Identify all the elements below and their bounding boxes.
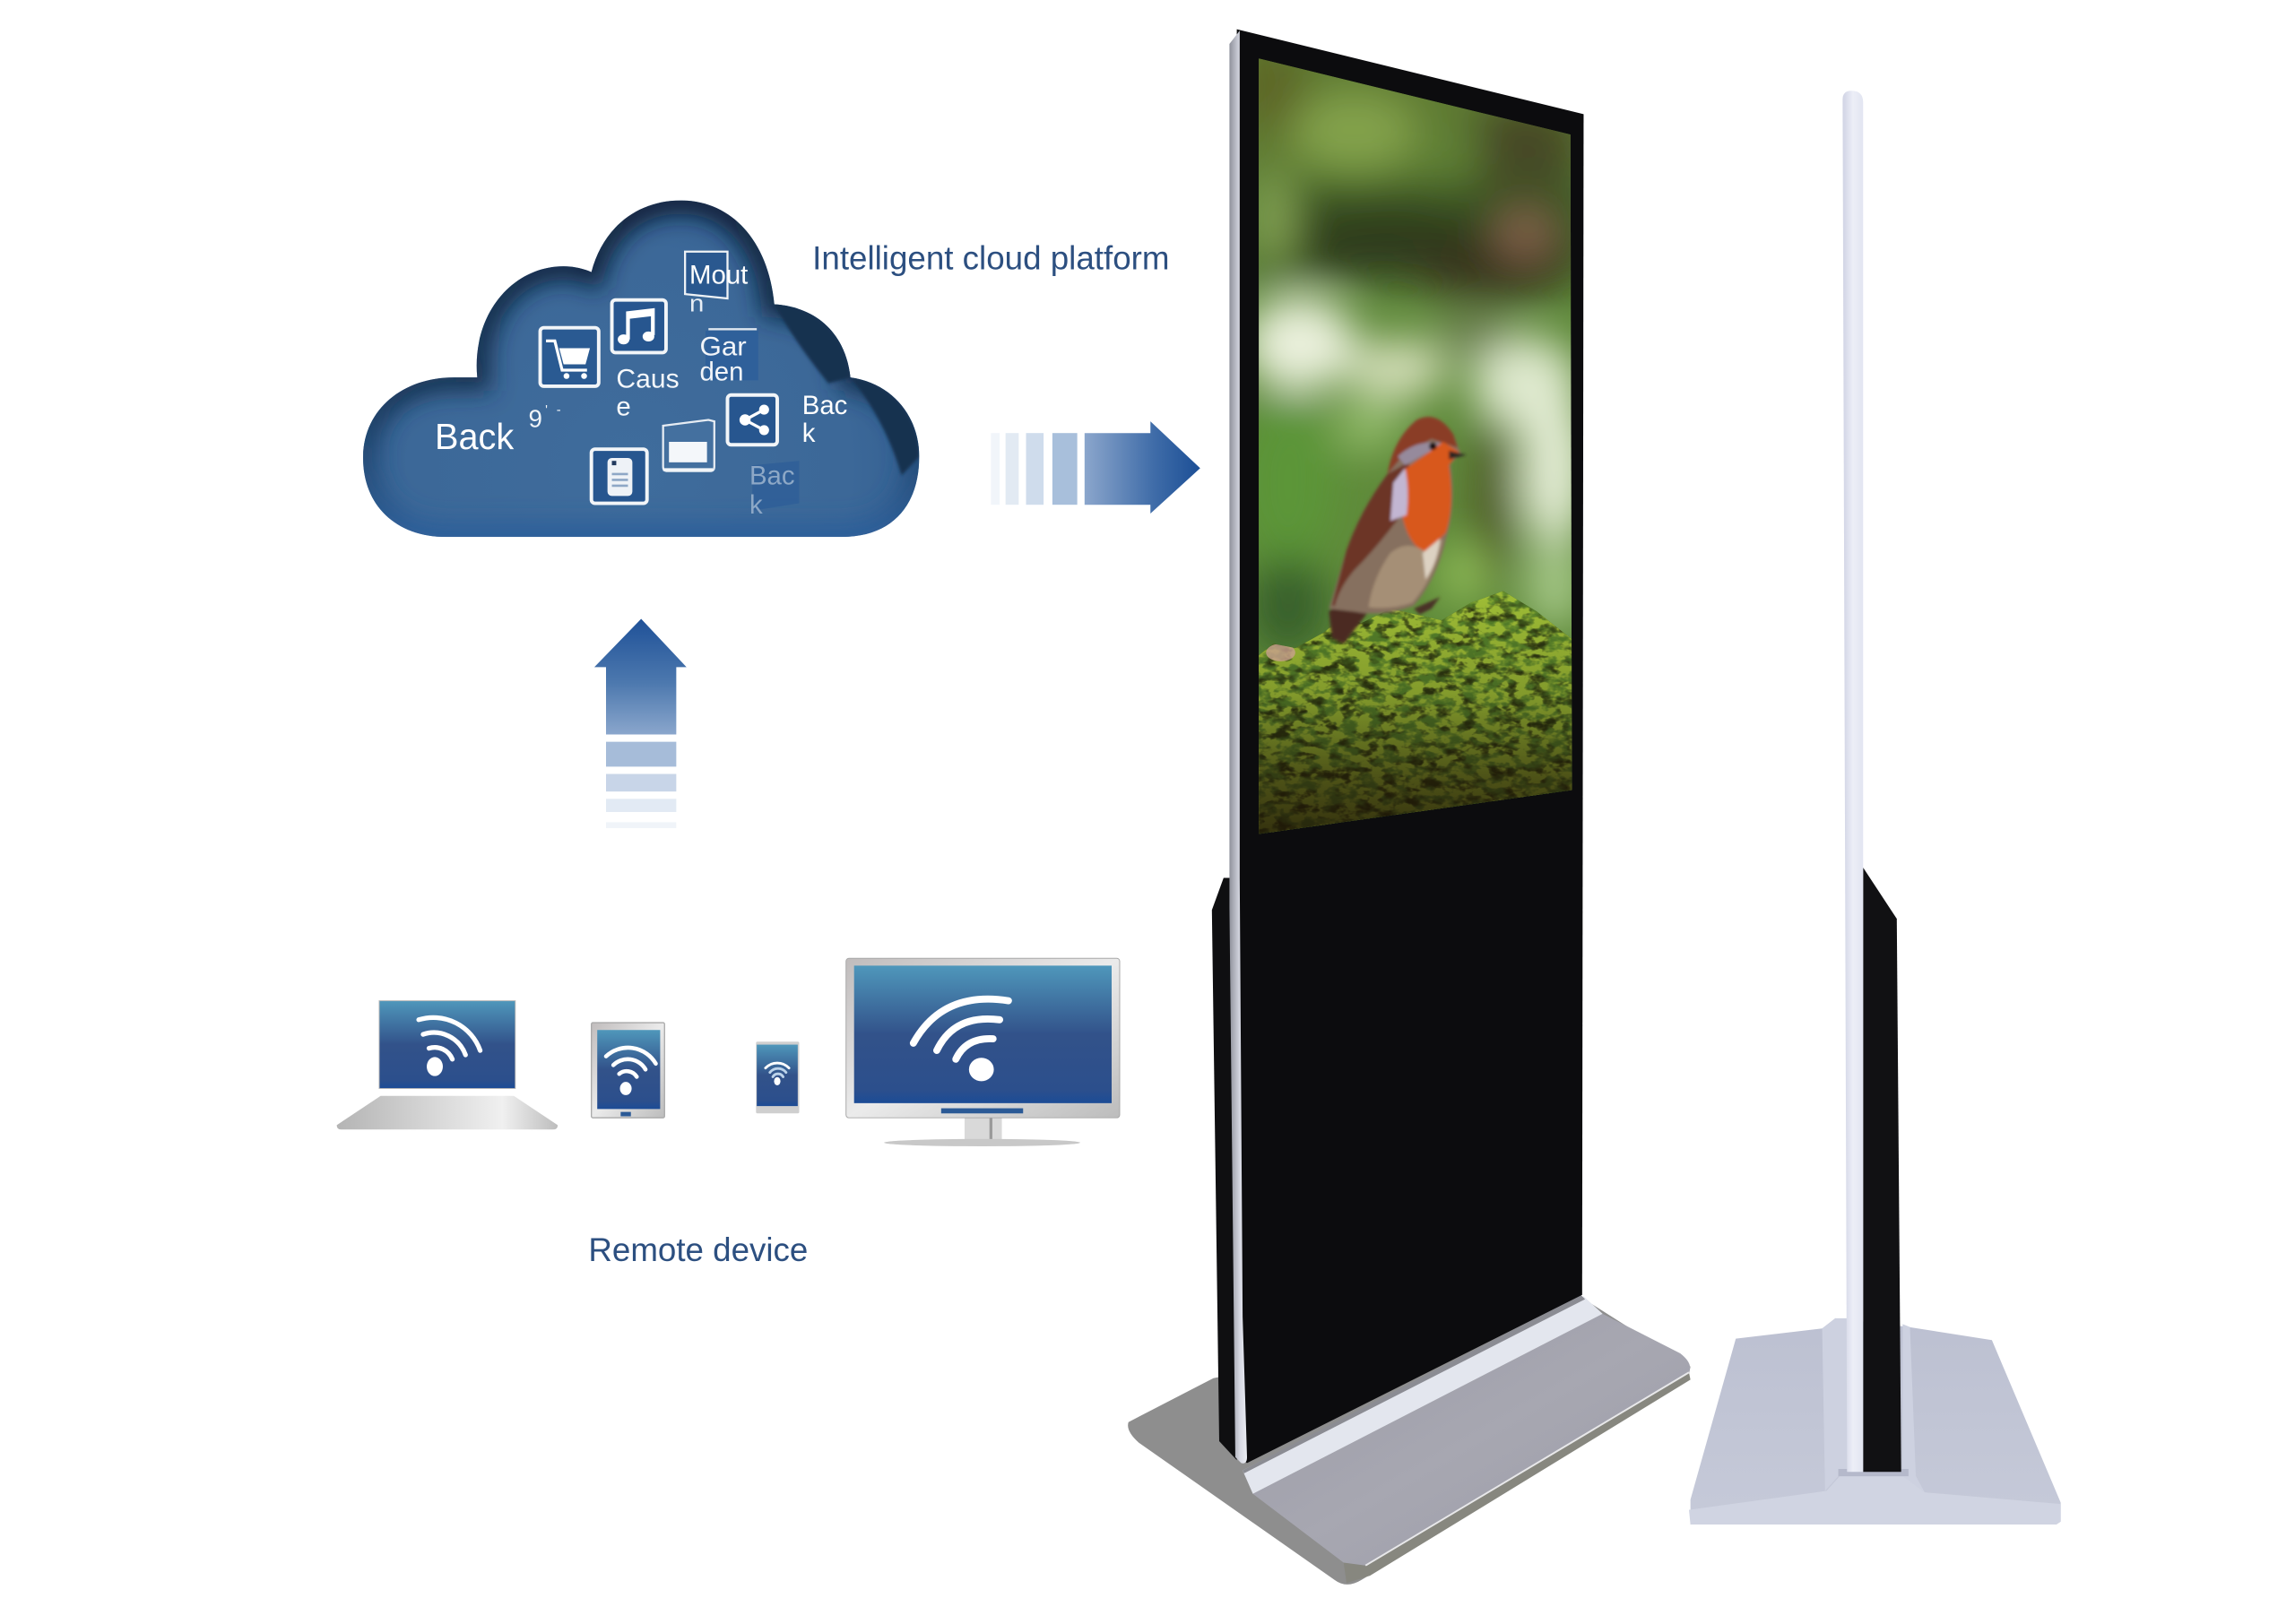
text: 9 fragment: 9 bbox=[528, 405, 542, 433]
device: tablet bbox=[592, 1023, 664, 1118]
icon: faint back tile bbox=[749, 461, 799, 520]
cloud shape bbox=[363, 201, 920, 538]
text: 9 fragment: ' bbox=[545, 403, 548, 418]
text: Back right: Bac bbox=[802, 391, 847, 420]
text: Cause: Caus bbox=[616, 365, 680, 394]
kiosk: front view bbox=[1128, 30, 1691, 1585]
icon: document bbox=[592, 449, 647, 504]
infographic: cloud publishing to digital signage kiosk bbox=[337, 29, 2061, 1585]
text: Cause: e bbox=[616, 393, 631, 422]
icon: music note bbox=[612, 300, 666, 352]
icon: wifi monitor bbox=[914, 999, 1009, 1081]
photo background bokeh bbox=[1259, 58, 1572, 654]
text: Garden: Gar bbox=[699, 333, 747, 362]
robin tail bbox=[1327, 608, 1368, 645]
side base bbox=[1689, 1318, 2061, 1525]
icon: share bbox=[727, 395, 777, 445]
heading: remote device: Remote device bbox=[588, 1231, 808, 1268]
arrow: cloud to kiosk bbox=[991, 421, 1200, 514]
panel: remote devices bbox=[337, 958, 1120, 1146]
icon: garden tile bbox=[699, 329, 758, 386]
kiosk rear panel bbox=[1212, 877, 1237, 1460]
icon: wifi laptop bbox=[419, 1017, 481, 1076]
robin head bbox=[1388, 417, 1458, 474]
kiosk base bbox=[1128, 1295, 1691, 1585]
panel: intelligent cloud bbox=[363, 201, 920, 538]
text: Back faint: k bbox=[749, 490, 763, 520]
icon: folder bbox=[663, 420, 714, 471]
device: laptop bbox=[337, 1001, 558, 1129]
device: phone bbox=[756, 1041, 799, 1113]
text: 9 fragment: - bbox=[557, 403, 561, 418]
heading: intelligent cloud platform: Intelligent cloud platform bbox=[812, 239, 1169, 276]
robin wing bbox=[1332, 462, 1411, 606]
text: Back faint: Bac bbox=[749, 461, 795, 490]
icon: wifi phone bbox=[766, 1063, 789, 1085]
kiosk silver edge bbox=[1229, 30, 1247, 1464]
screen photo: robin on moss bbox=[1259, 58, 1572, 834]
icon: wifi tablet bbox=[606, 1048, 656, 1095]
text: n fragment: n bbox=[689, 290, 704, 317]
robin body bbox=[1329, 417, 1460, 614]
icon: shopping cart bbox=[541, 328, 599, 386]
robin breast bbox=[1402, 442, 1459, 553]
device: monitor bbox=[846, 958, 1120, 1146]
kiosk front panel bbox=[1237, 30, 1583, 1463]
text: Back right: k bbox=[802, 419, 816, 448]
side white pole bbox=[1842, 91, 1863, 1472]
icon: mountain tile bbox=[685, 252, 748, 298]
arrow: devices to cloud bbox=[594, 619, 687, 828]
kiosk: side view bbox=[1689, 91, 2061, 1525]
text: Garden: den bbox=[699, 357, 743, 386]
text: Back large: Back bbox=[435, 416, 515, 457]
photo robin bbox=[1329, 417, 1467, 644]
text: Mout: Mout bbox=[689, 261, 748, 290]
side black panel bbox=[1863, 868, 1901, 1472]
photo moss bbox=[1259, 592, 1572, 834]
